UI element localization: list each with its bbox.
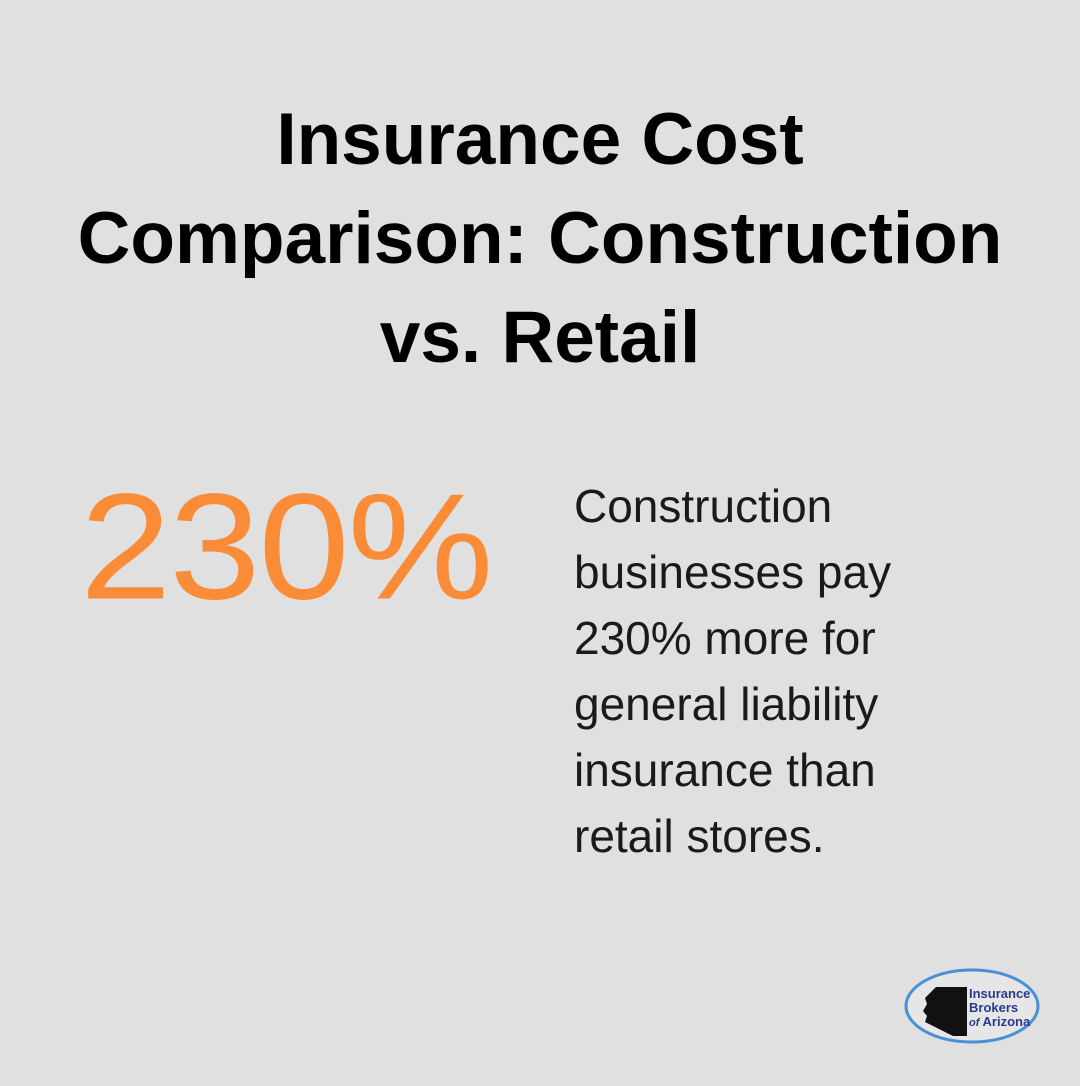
logo: Insurance Brokers of Arizona: of Arizona [969,1014,1031,1029]
description text: 230% more for [574,612,876,664]
big stat: 230%: 230% [80,462,491,631]
title: Comparison: Construction [78,198,1002,279]
logo: Insurance Brokers of Arizona [904,968,1040,1044]
title: vs. Retail [380,297,700,378]
description text [574,480,891,862]
logo: Insurance Brokers of Arizona: Brokers [969,1000,1018,1015]
title [78,99,1002,378]
description text: businesses pay [574,546,891,598]
title: Insurance Cost [276,99,804,180]
description text: insurance than [574,744,876,796]
description text: retail stores. [574,810,825,862]
description text: general liability [574,678,878,730]
description text: Construction [574,480,832,532]
logo: Insurance Brokers of Arizona: Insurance [969,986,1030,1001]
